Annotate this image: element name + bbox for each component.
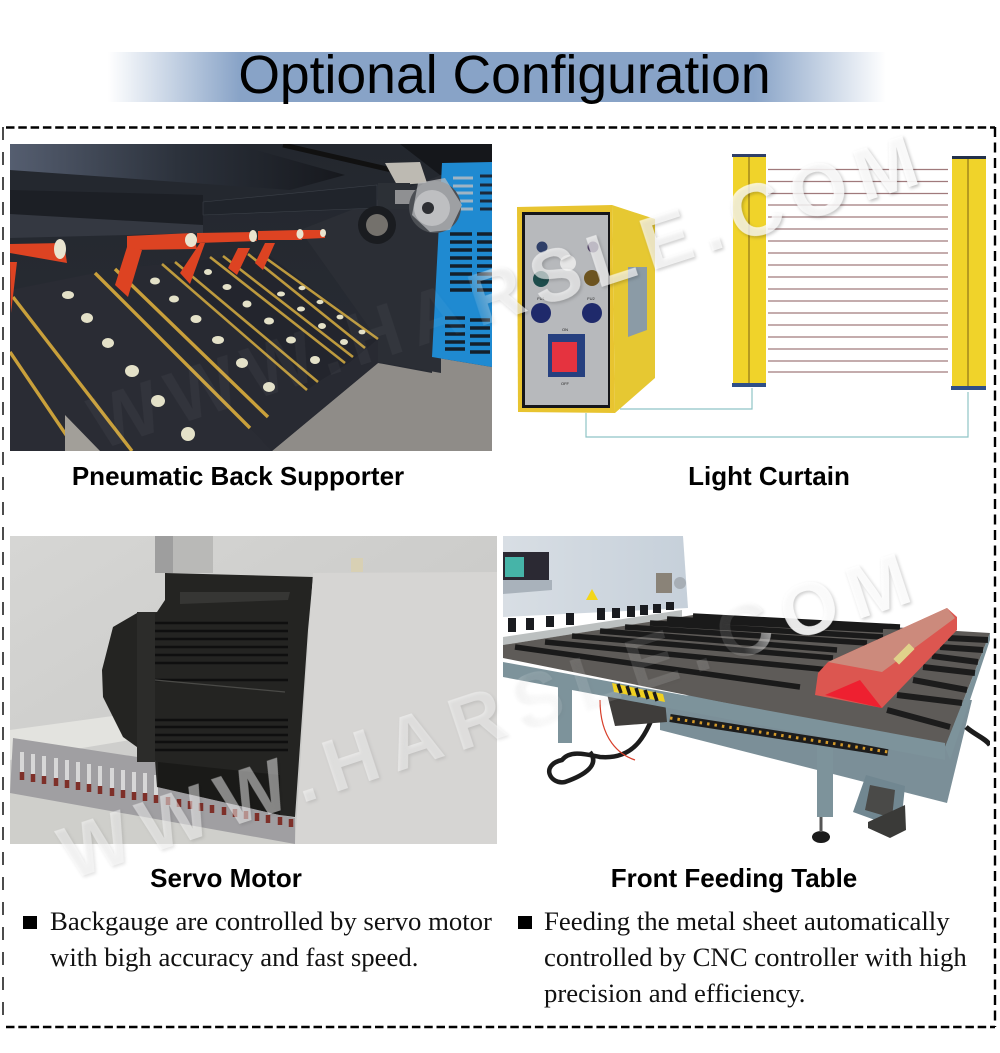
table frame and legs	[558, 683, 972, 843]
control box: OFF	[561, 381, 570, 386]
table top	[503, 615, 990, 760]
gearbox	[409, 178, 462, 233]
shear machine	[503, 536, 688, 645]
control box: FU1	[537, 296, 546, 301]
arm beam and rod	[203, 145, 427, 244]
photo: servo motor	[10, 536, 497, 844]
control box: ON	[562, 327, 568, 332]
heading: pneumatic back supporter: Pneumatic Back Supporter	[72, 461, 404, 491]
title banner	[108, 46, 886, 105]
floor	[272, 357, 492, 451]
blue cabinet	[432, 162, 492, 367]
white cabinet	[295, 572, 497, 844]
text block: servo motor description	[23, 906, 492, 972]
cable drag chain	[670, 718, 888, 752]
control box: FU2	[587, 296, 596, 301]
text block: servo motor description: Backgauge are controlled by servo motor	[50, 906, 492, 936]
cables and wiring	[546, 700, 990, 785]
cable trunking	[10, 738, 295, 844]
motor body	[102, 573, 313, 817]
red support arms	[10, 229, 326, 313]
text block: servo motor description: with bigh accuracy and fast speed.	[50, 942, 418, 972]
title banner: Optional Configuration	[238, 46, 771, 105]
text block: feeding table description: Feeding the metal sheet automatically	[544, 906, 950, 936]
photo: front feeding table	[503, 536, 990, 843]
text block: feeding table description: precision and efficiency.	[544, 978, 805, 1008]
control box	[517, 205, 655, 413]
light beams	[768, 170, 948, 372]
watermark: lower: WWW.HARSLE.COM	[49, 537, 920, 895]
photo: light curtain	[517, 154, 986, 437]
perforated deck	[10, 254, 378, 451]
connecting wires	[586, 388, 968, 437]
heading: front feeding table: Front Feeding Table	[611, 863, 857, 893]
left emitter bar	[732, 154, 766, 387]
text block: feeding table description: controlled by CNC controller with high	[544, 942, 967, 972]
text block: feeding table description	[518, 906, 967, 1008]
watermark: upper: WWW.HARSLE.COM	[79, 119, 928, 465]
hazard stripe	[612, 683, 665, 702]
machine wall	[432, 357, 441, 373]
heading: servo motor: Servo Motor	[150, 863, 302, 893]
right receiver bar	[951, 156, 986, 390]
red wrapped package	[815, 608, 957, 708]
heading: light curtain: Light Curtain	[688, 461, 850, 491]
photo: pneumatic back supporter	[10, 144, 492, 451]
